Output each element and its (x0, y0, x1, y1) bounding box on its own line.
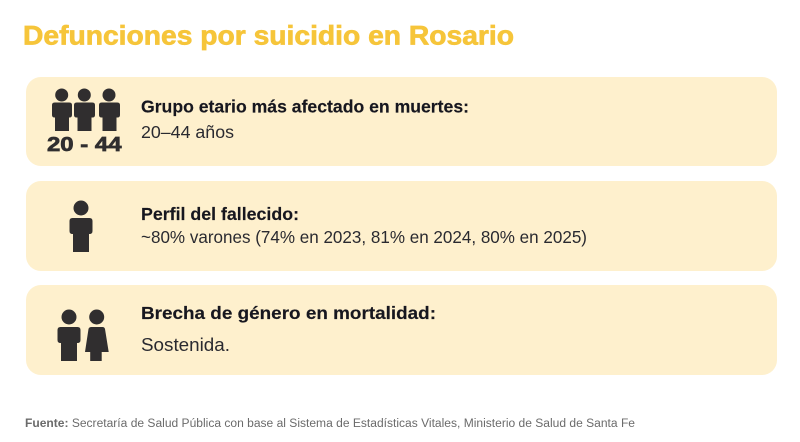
heading: grupo etario: Grupo etario más afectado en muertes: (141, 96, 469, 116)
text: grupo etario: 20–44 años (141, 122, 234, 142)
text: brecha: Sostenida. (141, 334, 230, 355)
icon: person (70, 200, 92, 252)
panel: perfil (26, 181, 777, 271)
icon: man and woman (58, 310, 109, 361)
panel: grupo etario (26, 77, 777, 166)
icon: three people 20-44 (47, 88, 123, 156)
icon: three people 20-44: 20 - 44 (47, 134, 123, 156)
panel: brecha (26, 285, 777, 375)
title: Defunciones por suicidio en Rosario (23, 20, 514, 50)
text: perfil: ~80% varones (74% en 2023, 81% en 2024, 80% en 2025) (141, 227, 587, 247)
heading: brecha: Brecha de género en mortalidad: (141, 303, 436, 323)
heading: perfil: Perfil del fallecido: (141, 204, 299, 224)
source note: Fuente: Secretaría de Salud Pública con base al Sistema de Estadísticas Vitales, Ministerio de Salud de Santa Fe (25, 418, 635, 430)
